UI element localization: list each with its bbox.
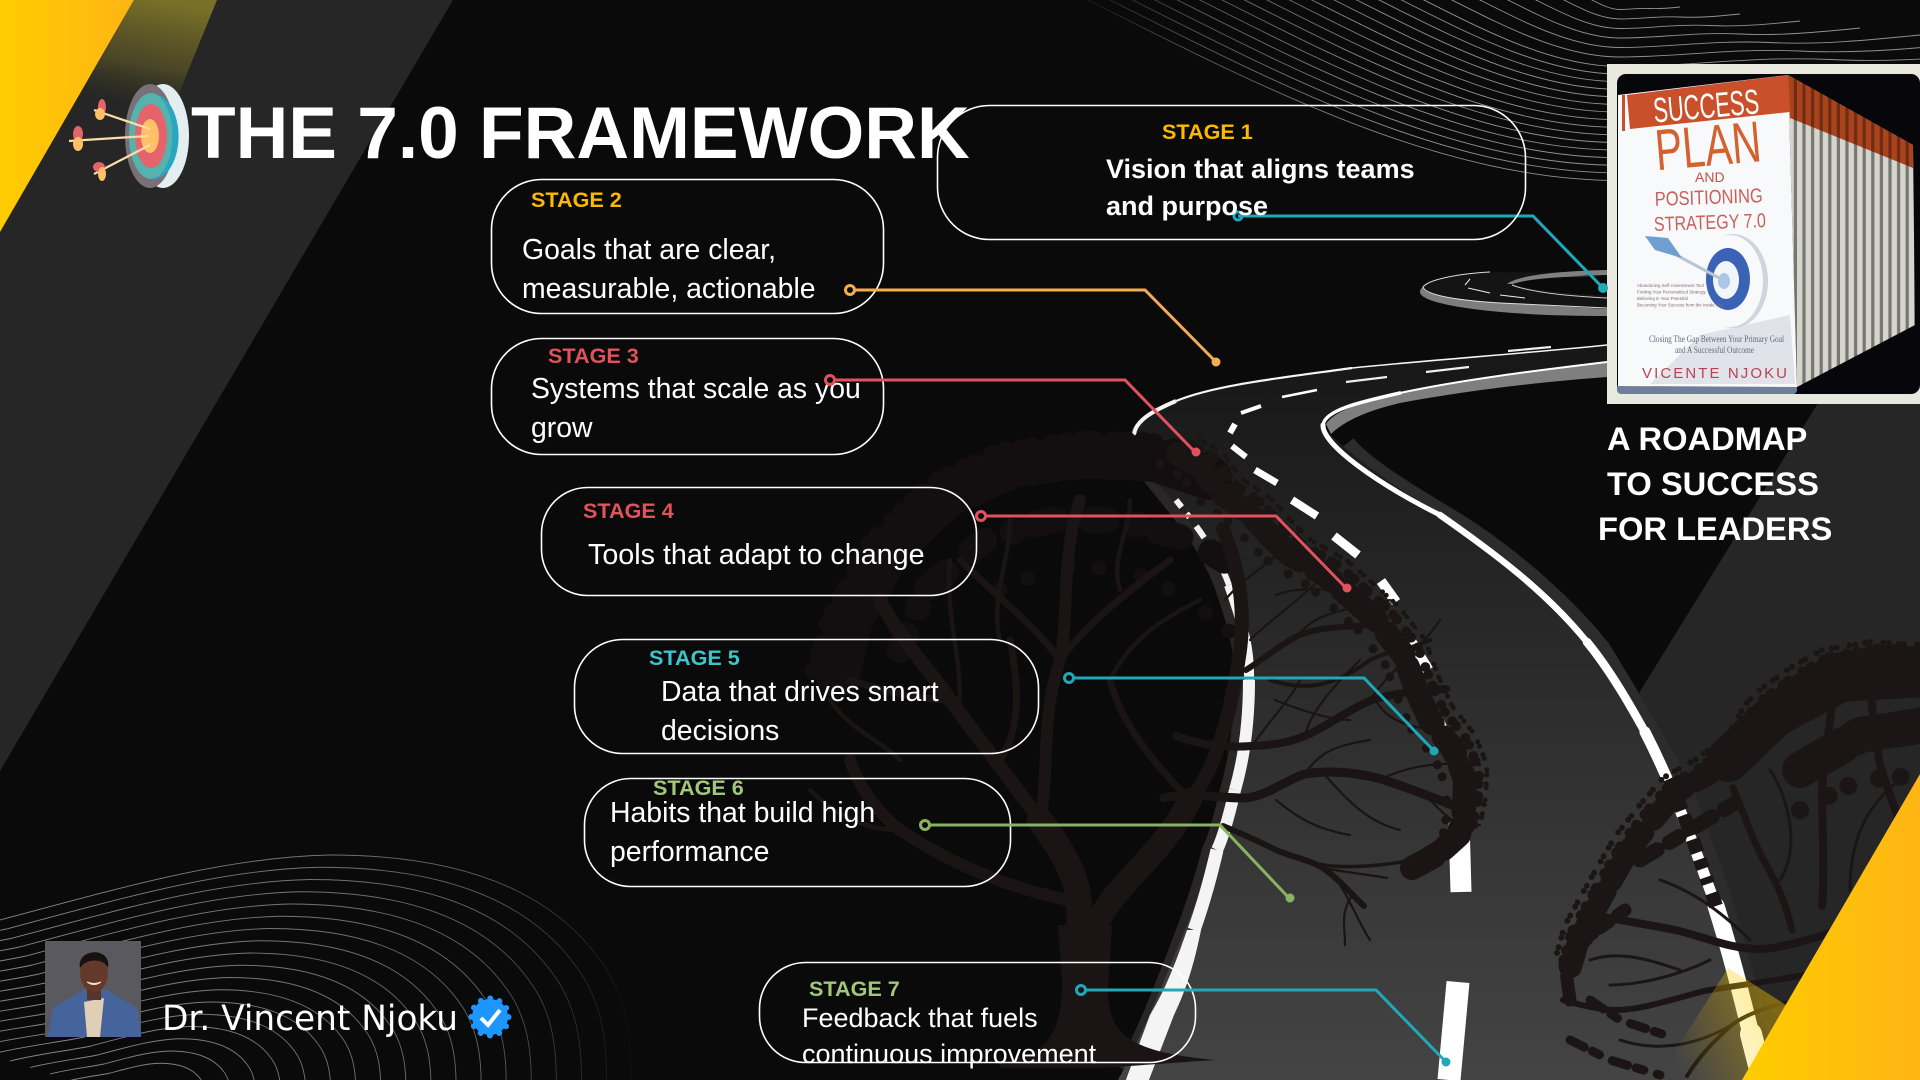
diagonal grey stripe left bbox=[0, 0, 453, 771]
olive glow top left bbox=[84, 0, 217, 110]
book target bbox=[1645, 234, 1768, 328]
left white edge line bbox=[1134, 345, 1607, 930]
panel: stage 4 bbox=[542, 488, 1350, 596]
roadmap caption: TO SUCCESS bbox=[1607, 465, 1819, 502]
connector: stage 3 bbox=[826, 376, 1199, 455]
panel: stage 2: STAGE 2 bbox=[531, 187, 622, 212]
book image: Becoming Your Success from the Inside Out bbox=[1637, 302, 1724, 308]
book image: AND bbox=[1695, 169, 1725, 185]
crown foliage bbox=[815, 440, 1240, 675]
connector: stage 7 bbox=[1076, 986, 1449, 1065]
big tree silhouette bbox=[810, 440, 1487, 1068]
panel: stage 7: continuous improvement bbox=[802, 1039, 1097, 1069]
panel: stage 1: STAGE 1 bbox=[1162, 119, 1253, 144]
roadmap caption: FOR LEADERS bbox=[1598, 510, 1832, 547]
connector: stage 5 bbox=[1064, 674, 1437, 754]
branches bbox=[1563, 680, 1920, 1076]
panel: stage 7: Feedback that fuels bbox=[802, 1003, 1038, 1033]
icon: verified badge bbox=[472, 998, 508, 1036]
grey underside bbox=[1326, 362, 1607, 434]
tattered road edge bbox=[1669, 779, 1716, 906]
main road bbox=[1118, 345, 1775, 1080]
book image: Finding Your Personalized Strategy bbox=[1637, 290, 1706, 294]
book image: Closing The Gap Between Your Primary Goal bbox=[1649, 334, 1784, 345]
road surface bbox=[1118, 345, 1775, 1080]
wave lines bottom left bbox=[0, 855, 632, 1080]
panel: stage 2: measurable, actionable bbox=[522, 273, 816, 305]
author portrait bbox=[45, 941, 141, 1037]
target body bbox=[137, 84, 189, 188]
connector: stage 1 bbox=[1234, 212, 1606, 292]
arrows bbox=[69, 110, 150, 174]
panel: stage 6 bbox=[584, 775, 1293, 901]
right white edge line bbox=[1323, 362, 1764, 1080]
panel: stage 3 bbox=[492, 338, 1199, 455]
panel: stage 1: Vision that aligns teams bbox=[1106, 154, 1415, 184]
olive glow bottom right bbox=[1657, 968, 1786, 1080]
road right shoulder bbox=[1345, 445, 1775, 1080]
target icon bbox=[69, 84, 189, 188]
book image: VICENTE NJOKU bbox=[1642, 365, 1787, 382]
book image: Abandoning Self-Assessment Tool bbox=[1637, 283, 1704, 288]
book image: POSITIONING bbox=[1654, 185, 1763, 211]
branches bbox=[810, 500, 1480, 945]
book image: Believing in Your Potential bbox=[1637, 296, 1688, 301]
panel: stage 3: grow bbox=[531, 412, 593, 444]
yellow corner top left bbox=[0, 0, 134, 232]
book pages bbox=[1788, 75, 1915, 387]
book image: and A Successful Outcome bbox=[1675, 345, 1754, 356]
book image bbox=[1607, 64, 1920, 404]
connector: stage 4 bbox=[976, 512, 1350, 591]
panel: stage 5: Data that drives smart bbox=[661, 676, 939, 708]
left white edge line lower taper bbox=[1124, 930, 1201, 1080]
panel: stage 1: and purpose bbox=[1106, 191, 1268, 221]
panel: stage 6: performance bbox=[610, 836, 769, 868]
diagonal grey stripe right bbox=[1400, 238, 1920, 1080]
panel: stage 2: Goals that are clear, bbox=[522, 234, 776, 266]
book frame bbox=[1607, 64, 1920, 404]
road left shoulder bbox=[1125, 440, 1241, 1070]
foliage along the road bbox=[1160, 440, 1487, 878]
book image: SUCCESS bbox=[1652, 82, 1761, 130]
book image: PLAN bbox=[1652, 109, 1764, 183]
panel: stage 6: Habits that build high bbox=[610, 797, 875, 829]
panel: stage 4: Tools that adapt to change bbox=[588, 539, 925, 571]
author name: Dr. Vincent Njoku bbox=[162, 999, 458, 1039]
centre dashes bbox=[1230, 347, 1551, 1080]
panel: stage 3: Systems that scale as you bbox=[531, 373, 861, 405]
book cover bbox=[1618, 75, 1797, 387]
panel: stage 5: STAGE 5 bbox=[649, 645, 740, 670]
roadmap caption bbox=[1598, 420, 1832, 547]
book floor shading bbox=[1650, 315, 1795, 384]
panel: stage 4: STAGE 4 bbox=[583, 498, 674, 523]
panel: stage 6: STAGE 6 bbox=[653, 775, 744, 800]
far road hairpin bbox=[1420, 270, 1607, 316]
yellow corner bottom right bbox=[1742, 774, 1920, 1080]
title: THE 7.0 FRAMEWORK bbox=[191, 93, 970, 174]
trunk bbox=[1000, 925, 1215, 1068]
wave lines top right bbox=[1050, 0, 1920, 180]
fine twigs bbox=[1225, 530, 1480, 945]
panel: stage 5: decisions bbox=[661, 715, 779, 747]
canopy bbox=[1557, 642, 1920, 1075]
connector: stage 6 bbox=[920, 820, 1293, 901]
panel: stage 3: STAGE 3 bbox=[548, 343, 639, 368]
panel: stage 7 bbox=[760, 962, 1449, 1069]
panel: stage 7: STAGE 7 bbox=[809, 976, 900, 1001]
book image: STRATEGY 7.0 bbox=[1654, 210, 1766, 236]
panel: stage 2 bbox=[492, 180, 1219, 365]
connector: stage 2 bbox=[846, 286, 1219, 365]
panel: stage 5 bbox=[574, 640, 1437, 754]
roadmap caption: A ROADMAP bbox=[1607, 420, 1807, 457]
right tree silhouette bbox=[1557, 642, 1920, 1076]
panel: stage 1 bbox=[938, 106, 1606, 292]
